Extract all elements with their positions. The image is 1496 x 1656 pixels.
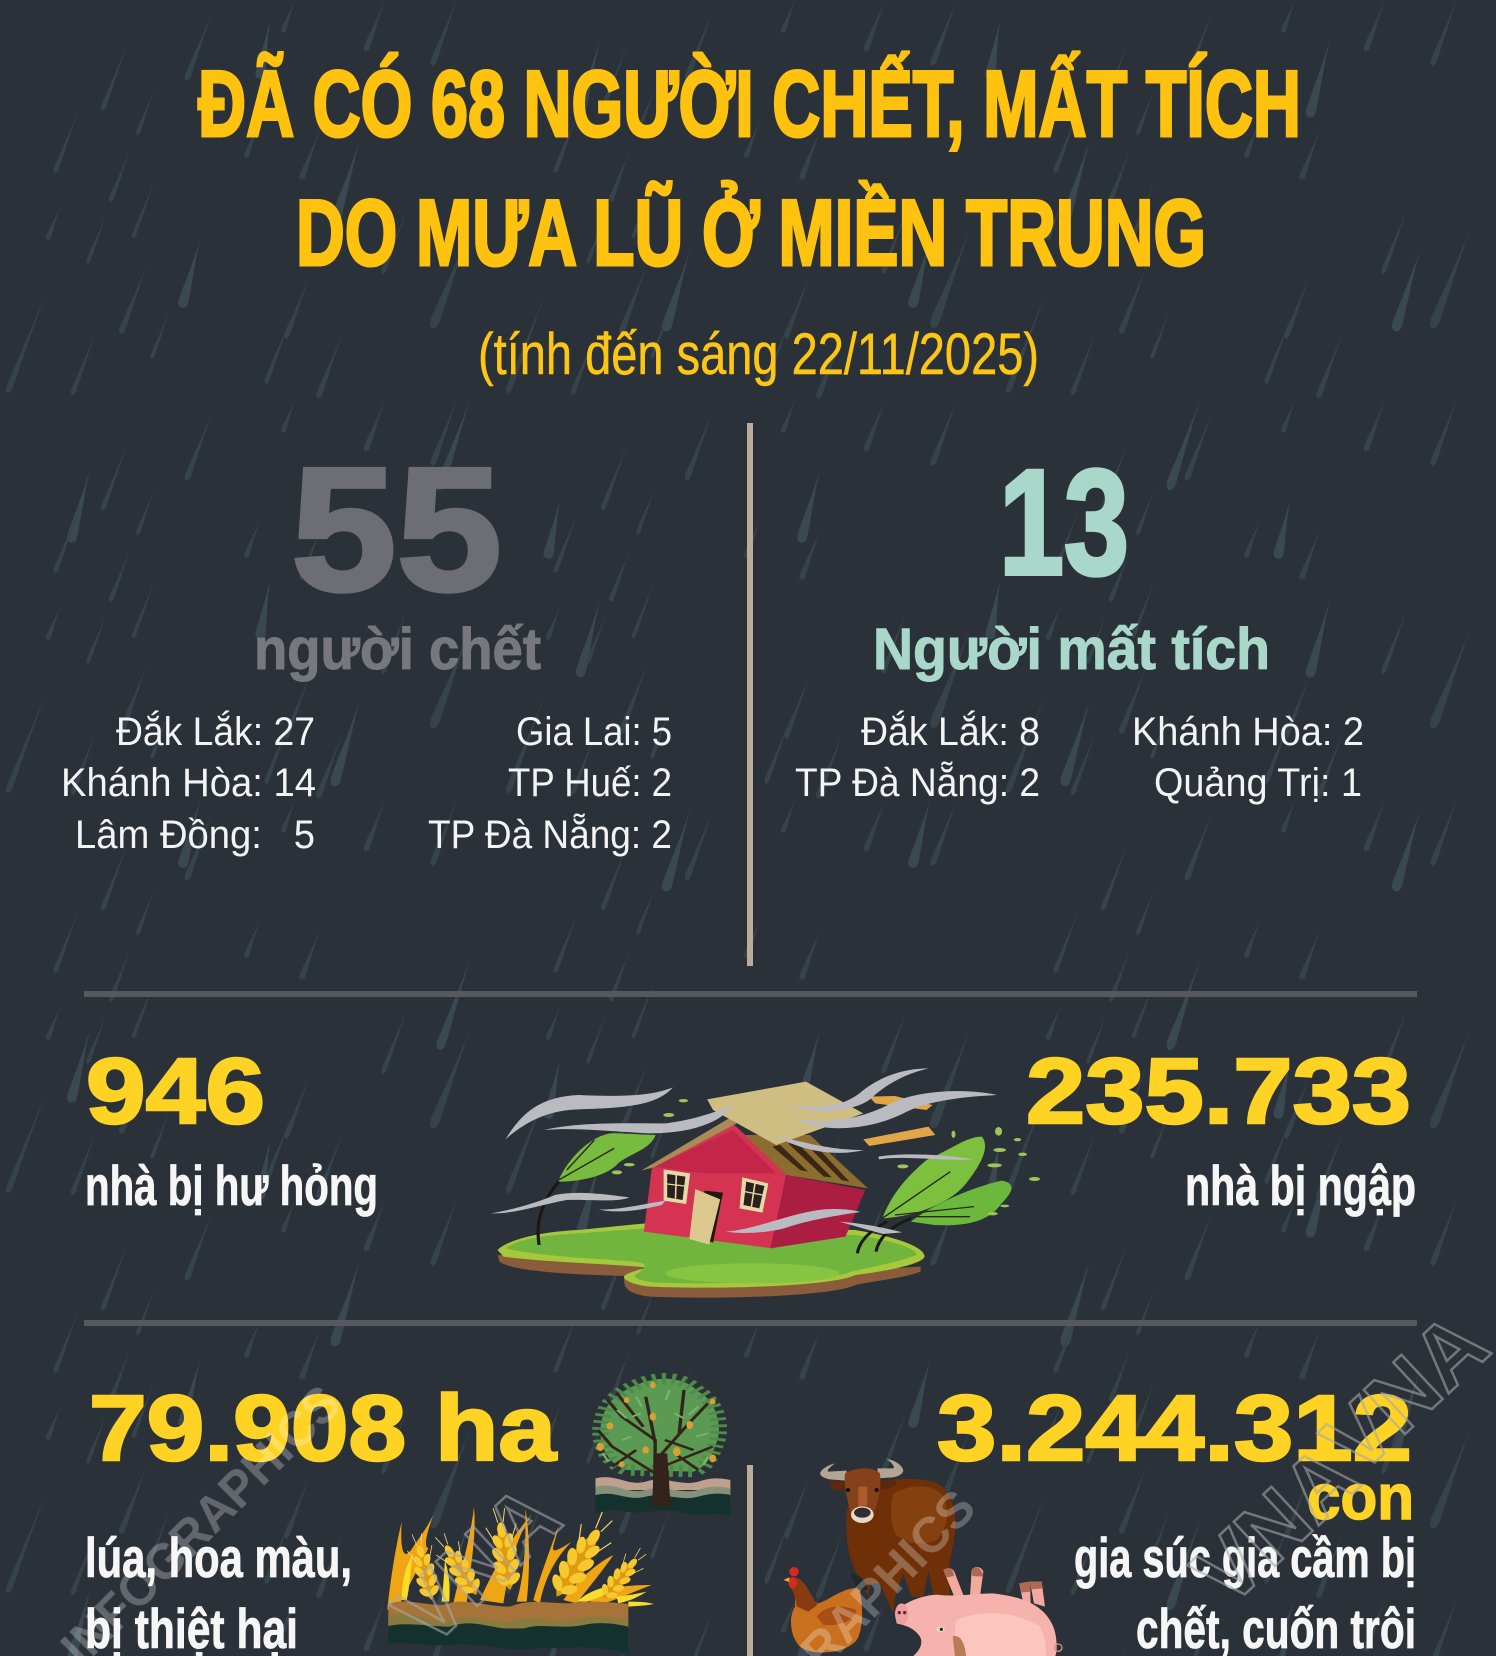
icon: farm animals <box>783 1459 1062 1656</box>
horizontal divider 2 <box>84 1320 1417 1326</box>
missing by province: Đắk Lắk: 8 <box>861 709 1040 754</box>
stat: damaged houses: 946 <box>86 1039 265 1143</box>
stat: flooded houses: 235.733 <box>1026 1039 1411 1143</box>
chicken <box>783 1567 867 1652</box>
watermark: outlined VNA logos: VNA <box>1173 1425 1376 1624</box>
stat: crops damaged: 79.908 ha <box>89 1376 557 1480</box>
dead by province: Gia Lai: 5 <box>516 710 672 754</box>
label missing: Người mất tích <box>873 617 1270 682</box>
dead by province: Lâm Đồng: 5 <box>75 813 315 857</box>
stat: crops damaged: lúa, hoa màu, <box>85 1526 352 1589</box>
stat: livestock lost <box>937 1376 1416 1656</box>
dead by province: Đắk Lắk: 27 <box>116 709 315 754</box>
icon: rice wheat field <box>387 1505 654 1653</box>
icon: house in storm <box>491 1068 1040 1298</box>
subtitle date: (tính đến sáng 22/11/2025) <box>478 322 1039 387</box>
number 13 missing: 13 <box>999 438 1129 606</box>
dead by province: TP Đà Nẵng: 2 <box>428 812 672 857</box>
missing by province: Khánh Hòa: 2 <box>1132 710 1364 754</box>
vertical divider top <box>747 423 753 966</box>
horizontal divider 1 <box>84 991 1417 997</box>
stat: damaged houses: nhà bị hư hỏng <box>85 1154 378 1217</box>
missing by province <box>795 709 1364 805</box>
cow <box>820 1459 955 1613</box>
stat: livestock lost: 3.244.312 <box>937 1376 1412 1480</box>
icon: tree in flood <box>595 1379 730 1517</box>
title <box>198 50 1301 285</box>
label dead: người chết <box>254 617 541 682</box>
stat: livestock lost: con <box>1307 1461 1414 1533</box>
dead by province: Khánh Hòa: 14 <box>61 761 316 805</box>
watermark: infographics text <box>50 1375 986 1656</box>
vertical divider bottom <box>747 1465 753 1656</box>
stat: damaged houses <box>85 1039 378 1217</box>
dead by province <box>61 709 672 857</box>
stat: crops damaged <box>85 1376 557 1656</box>
panel: deaths <box>61 432 672 857</box>
stat: flooded houses <box>1026 1039 1416 1217</box>
missing by province: Quảng Trị: 1 <box>1154 761 1362 805</box>
dead by province: TP Huế: 2 <box>508 761 672 805</box>
panel: missing <box>795 438 1364 805</box>
watermark: outlined VNA logos <box>375 1293 1496 1656</box>
missing by province: TP Đà Nẵng: 2 <box>795 760 1040 805</box>
pig <box>895 1567 1062 1656</box>
number 55 dead: 55 <box>291 432 502 628</box>
stat: flooded houses: nhà bị ngập <box>1185 1154 1416 1217</box>
